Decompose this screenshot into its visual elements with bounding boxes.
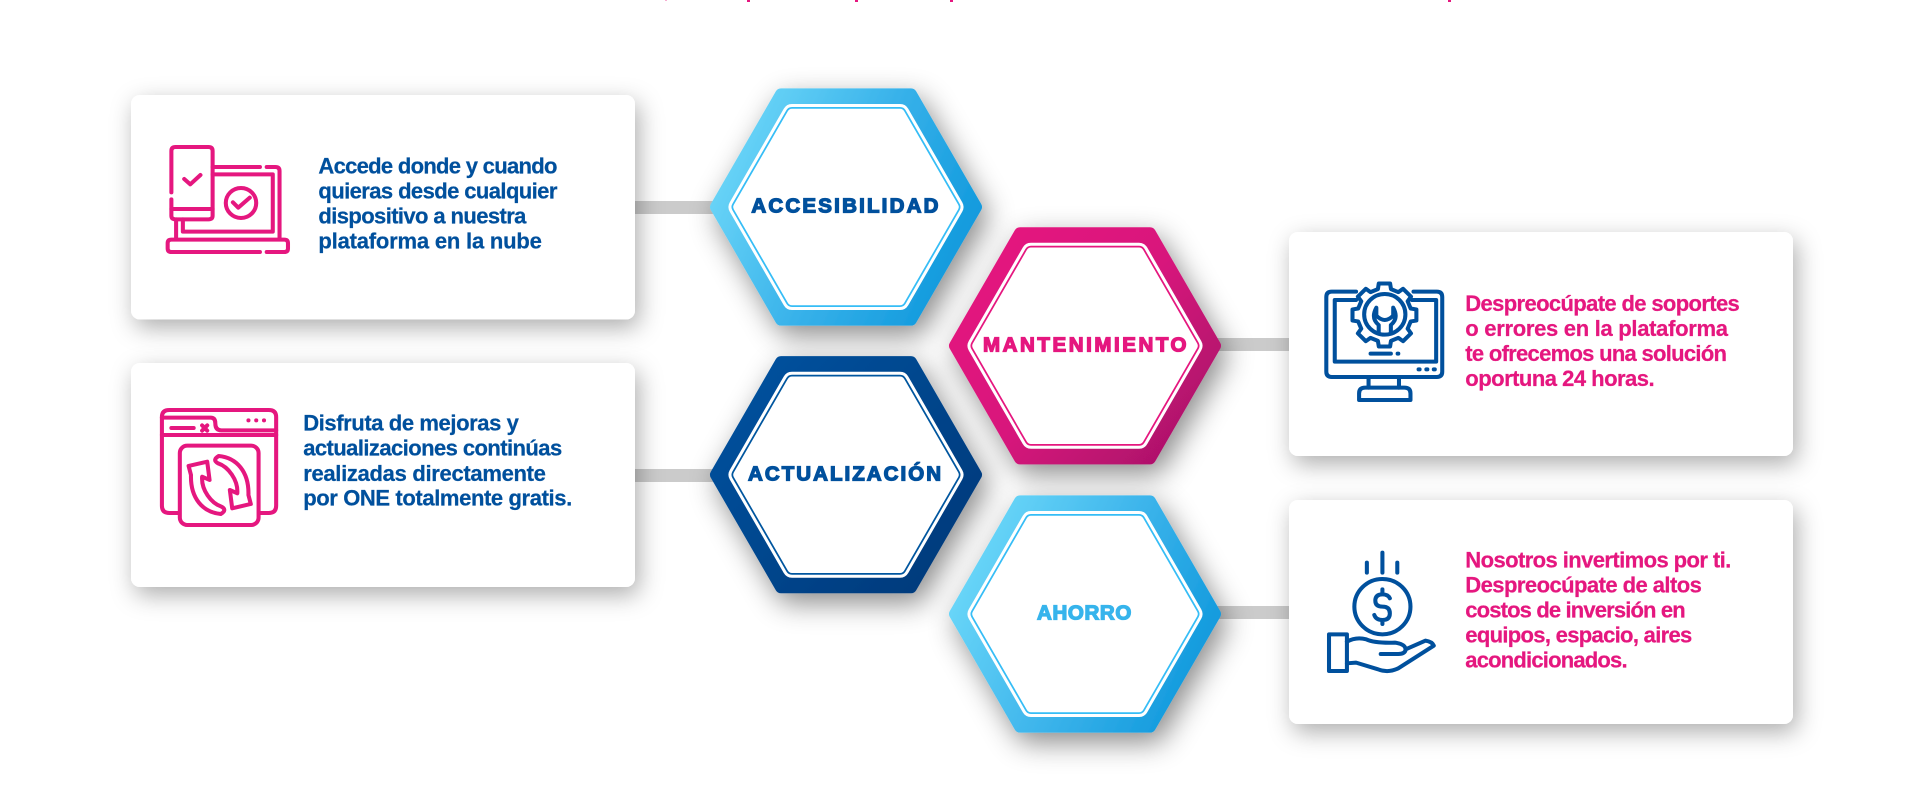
- panel: ahorro card: [1289, 500, 1793, 724]
- text block: por ONE totalmente gratis.: [303, 486, 572, 511]
- text block: o errores en la plataforma: [1465, 316, 1729, 341]
- text block: Disfruta de mejoras y: [303, 411, 520, 436]
- text block: dispositivo a nuestra: [318, 203, 527, 228]
- text block: plataforma en la nube: [318, 228, 542, 253]
- icon: monitor with gear and wrench: [1326, 283, 1442, 400]
- hexagon: mantenimiento: [955, 233, 1215, 458]
- card background: [131, 95, 635, 320]
- connector: actualización: [630, 469, 720, 482]
- text block: actualizaciones continúas: [303, 436, 562, 461]
- hexagon: accesibilidad: [716, 94, 976, 320]
- text block: [1465, 291, 1740, 391]
- panel: actualización card: [131, 363, 635, 587]
- text block: equipos, espacio, aires: [1465, 623, 1692, 648]
- connector: ahorro: [1212, 606, 1294, 619]
- text block: [303, 411, 572, 511]
- hexagon: actualización: [716, 362, 976, 587]
- label: ACCESIBILIDAD: [751, 195, 938, 218]
- icon: browser window with refresh arrows: [162, 410, 276, 525]
- label: MANTENIMIENTO: [983, 334, 1187, 357]
- text block: quieras desde cualquier: [318, 178, 558, 203]
- text block: Despreocúpate de soportes: [1465, 291, 1740, 316]
- text block: te ofrecemos una solución: [1465, 341, 1727, 366]
- connector: accesibilidad: [630, 201, 720, 214]
- card background: [1289, 500, 1793, 724]
- connector: mantenimiento: [1212, 338, 1294, 351]
- text block: Accede donde y cuando: [318, 153, 557, 178]
- text block: costos de inversión en: [1465, 598, 1686, 623]
- text block: [1465, 548, 1731, 673]
- hexagon: ahorro: [955, 501, 1215, 727]
- icon: hand holding coin: [1329, 553, 1434, 671]
- cropped headline fragments at top edge: [665, 0, 1451, 2]
- text block: acondicionados.: [1465, 648, 1628, 673]
- panel: accesibilidad card: [131, 95, 635, 320]
- text block: realizadas directamente: [303, 461, 546, 486]
- icon: laptop and phone: [168, 147, 288, 252]
- card background: [131, 363, 635, 587]
- label: AHORRO: [1037, 601, 1131, 624]
- panel: mantenimiento card: [1289, 232, 1793, 456]
- text block: [318, 153, 558, 253]
- text block: Despreocúpate de altos: [1465, 573, 1702, 598]
- card background: [1289, 232, 1793, 456]
- text block: Nosotros invertimos por ti.: [1465, 548, 1731, 573]
- label: ACTUALIZACIÓN: [748, 462, 941, 486]
- text block: oportuna 24 horas.: [1465, 366, 1655, 391]
